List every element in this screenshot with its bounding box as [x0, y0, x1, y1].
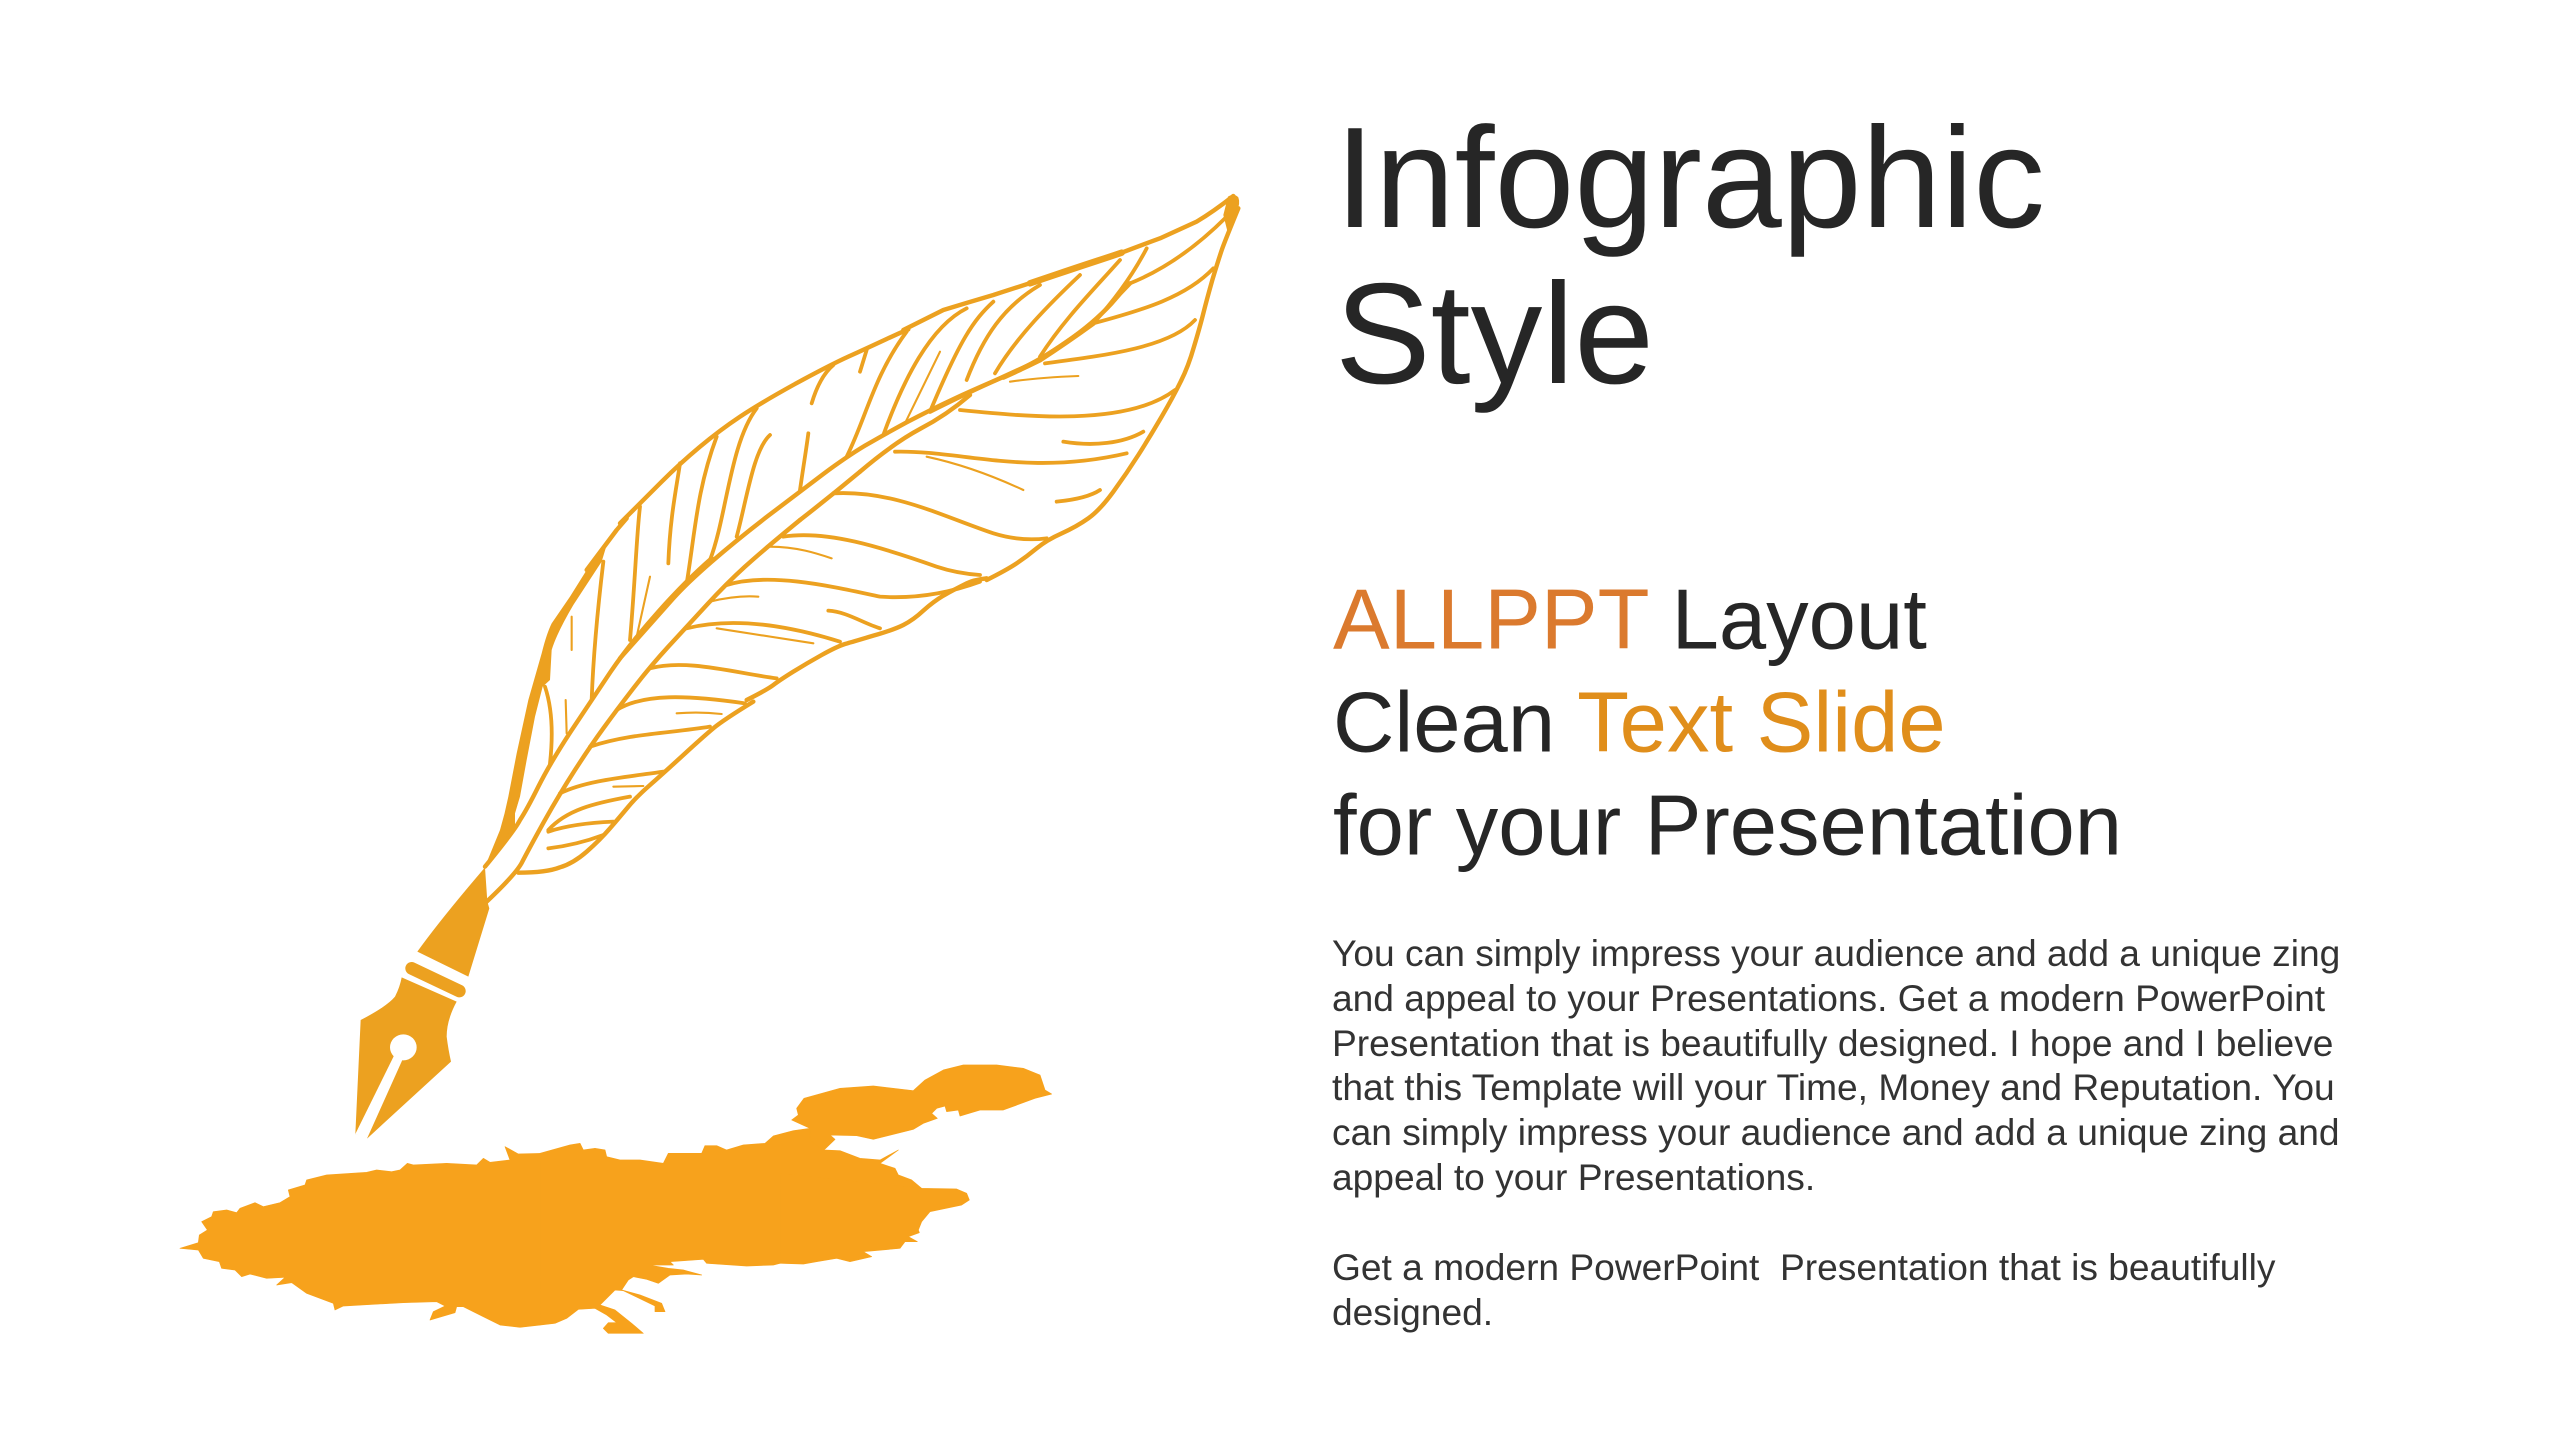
title: Style [1335, 254, 1654, 414]
nib point [355, 977, 457, 1138]
icon: feather quill [485, 195, 1239, 902]
ink blot centre [540, 1128, 922, 1333]
body text: and appeal to your Presentations. Get a modern PowerPoint [1332, 977, 2326, 1019]
ink blot upper [792, 1065, 1052, 1151]
nib upper body [417, 867, 489, 977]
subheading: ALLPPT Layout [1333, 572, 1927, 668]
nib slit [355, 1055, 402, 1139]
body text: appeal to your Presentations. [1332, 1156, 1815, 1198]
subheading [1333, 572, 2122, 874]
body text: designed. [1332, 1291, 1493, 1333]
ink blot left [180, 1147, 570, 1327]
icon: fountain pen nib [355, 867, 489, 1139]
nib collar band [412, 968, 459, 991]
feather tip section [833, 195, 1239, 580]
body text: that this Template will your Time, Money and Reputation. You [1332, 1066, 2335, 1108]
feather middle section [620, 329, 1020, 700]
body text: Get a modern PowerPoint Presentation that is beautifully [1332, 1246, 2276, 1288]
title [1335, 98, 2045, 414]
nib breather hole [390, 1034, 417, 1060]
feather base section [485, 518, 800, 902]
body text: Presentation that is beautifully designed. I hope and I believe [1332, 1022, 2333, 1064]
body text: You can simply impress your audience and add a unique zing [1332, 932, 2340, 974]
body text: can simply impress your audience and add a unique zing and [1332, 1111, 2340, 1153]
title: Infographic [1335, 98, 2045, 258]
subheading: Clean Text Slide [1333, 676, 1946, 770]
ink blot right [780, 1173, 969, 1264]
body text [1332, 932, 2340, 1333]
icon: ink splash [180, 1065, 1052, 1333]
subheading: for your Presentation [1333, 778, 2122, 874]
